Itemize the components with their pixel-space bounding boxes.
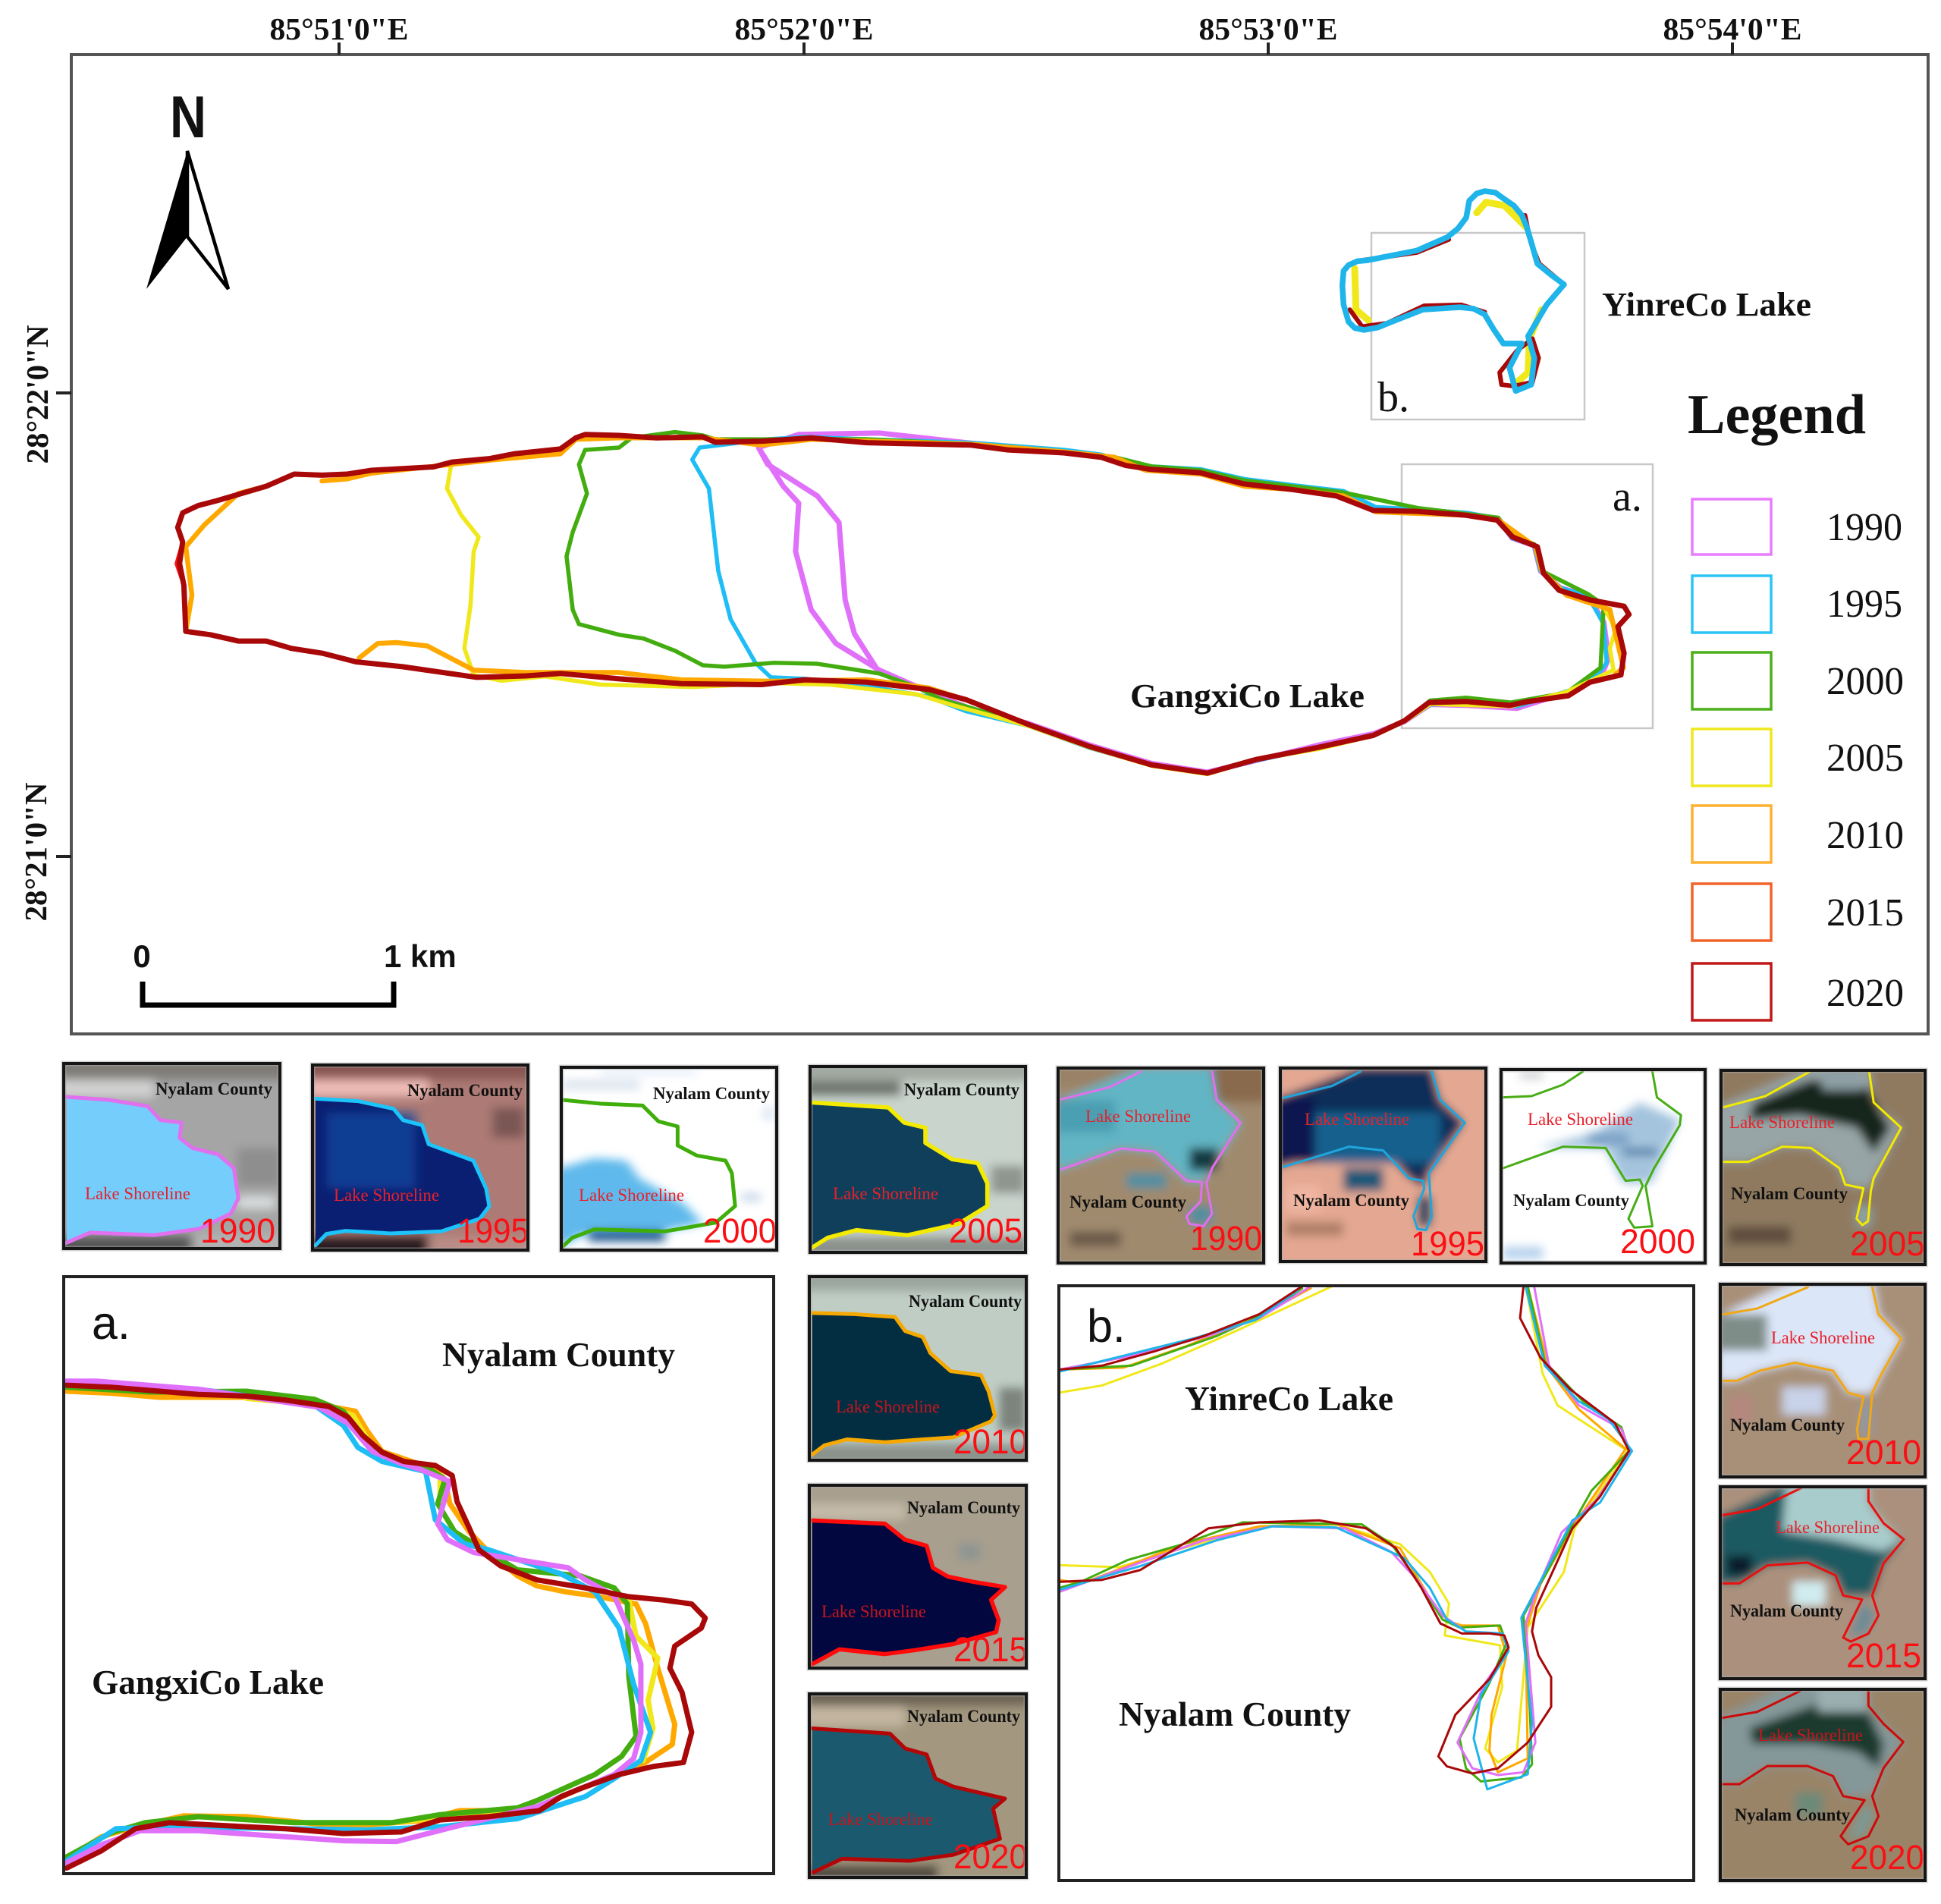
- legend title: Legend: [1688, 384, 1866, 446]
- thumbnail: GangxiCo 2020: Lake Shoreline: [828, 1810, 933, 1829]
- thumbnail: YinreCo 1990: Lake Shoreline: [1085, 1107, 1191, 1126]
- legend item 1990: 1990: [1826, 506, 1902, 549]
- thumbnail: GangxiCo 2015: [807, 1482, 1029, 1670]
- thumbnail: YinreCo 2015: [1717, 1484, 1928, 1681]
- label: inset a: a.: [1613, 473, 1642, 520]
- scale bar: [133, 938, 457, 1005]
- thumbnail: GangxiCo 2010: Lake Shoreline: [836, 1397, 940, 1416]
- legend item 2005: 2005: [1826, 737, 1904, 780]
- latitude axis labels: 28°21'0"N: [18, 782, 53, 921]
- thumbnail: YinreCo 1990: Nyalam County: [1069, 1192, 1186, 1211]
- longitude axis labels: 85°53'0"E: [1198, 11, 1338, 46]
- thumbnail: GangxiCo 1995: [309, 1062, 531, 1253]
- thumbnail: YinreCo 1990: 1990: [1190, 1219, 1262, 1258]
- thumbnail: GangxiCo 2015: Lake Shoreline: [821, 1602, 926, 1621]
- thumbnail: GangxiCo 1990: 1990: [200, 1211, 275, 1250]
- scale bar: 0: [133, 938, 151, 974]
- label: GangxiCo Lake: GangxiCo Lake: [1130, 677, 1365, 715]
- label: GangxiCo Lake: GangxiCo Lake: [92, 1664, 324, 1701]
- panel: inset b: [1059, 1286, 1694, 1880]
- thumbnail: YinreCo 2005: [1719, 1068, 1928, 1267]
- label: Nyalam County: Nyalam County: [1119, 1695, 1351, 1733]
- thumbnail: GangxiCo 2020: Nyalam County: [907, 1707, 1020, 1726]
- inset box a: [1402, 464, 1653, 728]
- panel: main map: [18, 11, 1928, 1034]
- label: a.: a.: [92, 1297, 130, 1349]
- legend item 2015: 2015: [1826, 891, 1904, 935]
- thumbnail: GangxiCo 2015: 2015: [953, 1630, 1028, 1669]
- thumbnail: GangxiCo 1990: Lake Shoreline: [85, 1184, 190, 1203]
- legend item 2000: 2000: [1826, 660, 1904, 703]
- thumbnail: YinreCo 1995: Nyalam County: [1293, 1191, 1409, 1210]
- thumbnail: YinreCo 2015: Nyalam County: [1730, 1601, 1843, 1620]
- thumbnail: YinreCo 2000: [1500, 1068, 1708, 1265]
- longitude axis labels: 85°51'0"E: [270, 11, 408, 46]
- thumbnail: YinreCo 2005: Lake Shoreline: [1729, 1113, 1835, 1132]
- thumbnail: GangxiCo 2010: Nyalam County: [909, 1292, 1022, 1311]
- thumbnail: GangxiCo 2005: Lake Shoreline: [833, 1184, 938, 1203]
- thumbnail: YinreCo 2010: Lake Shoreline: [1771, 1328, 1875, 1347]
- latitude axis labels: 28°22'0"N: [20, 325, 55, 464]
- legend item 1995: 1995: [1826, 583, 1902, 626]
- chart: inset b shorelines: [1060, 1287, 1632, 1789]
- icon: north arrow: [146, 83, 228, 289]
- thumbnail: GangxiCo 1995: Lake Shoreline: [334, 1186, 439, 1205]
- legend item 2015: [1692, 884, 1904, 941]
- thumbnail: GangxiCo 2010: 2010: [953, 1422, 1028, 1461]
- thumbnail: YinreCo 2015: Lake Shoreline: [1776, 1518, 1880, 1537]
- thumbnail: GangxiCo 2010: [807, 1274, 1029, 1463]
- thumbnail: YinreCo 2010: Nyalam County: [1730, 1415, 1845, 1434]
- legend item 2010: 2010: [1826, 814, 1904, 857]
- longitude axis labels: 85°54'0"E: [1663, 11, 1802, 46]
- thumbnail: YinreCo 2000: 2000: [1620, 1222, 1695, 1261]
- legend: [1688, 384, 1904, 1020]
- thumbnail: GangxiCo 1995: Nyalam County: [407, 1081, 523, 1100]
- icon: north arrow: N: [170, 83, 206, 150]
- thumbnail: YinreCo 2000: Lake Shoreline: [1528, 1110, 1633, 1129]
- thumbnail: YinreCo 1990: [1056, 1065, 1267, 1265]
- legend item 2000: [1692, 652, 1904, 709]
- thumbnail: YinreCo 2000: Nyalam County: [1513, 1191, 1629, 1210]
- label: YinreCo Lake: YinreCo Lake: [1602, 286, 1811, 323]
- legend item 2010: [1692, 806, 1904, 862]
- thumbnail: YinreCo 2020: Nyalam County: [1735, 1805, 1850, 1824]
- thumbnail: GangxiCo 2020: 2020: [953, 1837, 1028, 1876]
- chart: inset a shorelines: [67, 1381, 705, 1868]
- thumbnail: GangxiCo 2005: Nyalam County: [904, 1080, 1019, 1099]
- thumbnail: YinreCo 1995: [1277, 1065, 1488, 1264]
- legend item 1990: [1692, 499, 1902, 555]
- thumbnail: GangxiCo 2000: [550, 1064, 786, 1252]
- thumbnail: GangxiCo 2015: Nyalam County: [907, 1498, 1020, 1517]
- label: Nyalam County: Nyalam County: [442, 1336, 675, 1374]
- thumbnail: GangxiCo 2005: [807, 1064, 1029, 1255]
- thumbnail: YinreCo 2020: Lake Shoreline: [1758, 1726, 1863, 1745]
- thumbnail: YinreCo 2005: 2005: [1850, 1224, 1925, 1263]
- legend item 2005: [1692, 729, 1904, 786]
- thumbnail: YinreCo 2020: [1717, 1687, 1928, 1883]
- thumbnail: YinreCo 2010: 2010: [1846, 1433, 1921, 1472]
- latitude axis labels: [18, 325, 71, 921]
- thumbnail: YinreCo 1995: Lake Shoreline: [1305, 1110, 1409, 1129]
- thumbnail: YinreCo 2015: 2015: [1846, 1636, 1921, 1675]
- legend item 2020: [1692, 963, 1904, 1020]
- thumbnail: YinreCo 2005: Nyalam County: [1731, 1184, 1848, 1203]
- panel: inset a: [64, 1277, 774, 1874]
- longitude axis labels: [270, 11, 1802, 55]
- thumbnail: YinreCo 2010: [1717, 1282, 1928, 1479]
- thumbnail: GangxiCo 1990: [61, 1060, 282, 1252]
- thumbnail: GangxiCo 2000: Lake Shoreline: [579, 1186, 684, 1205]
- legend item 2020: 2020: [1826, 972, 1904, 1015]
- thumbnail: GangxiCo 2020: [807, 1692, 1029, 1880]
- legend item 1995: [1692, 576, 1902, 633]
- label: inset b: b.: [1377, 374, 1409, 421]
- thumbnail: GangxiCo 2000: Nyalam County: [653, 1084, 770, 1103]
- thumbnail: GangxiCo 1990: Nyalam County: [155, 1079, 272, 1098]
- thumbnail: YinreCo 1995: 1995: [1411, 1224, 1484, 1263]
- thumbnail: GangxiCo 2005: 2005: [949, 1211, 1022, 1250]
- scale bar: 1 km: [384, 938, 457, 974]
- thumbnail: YinreCo 2020: 2020: [1850, 1838, 1924, 1877]
- chart: YinreCo lake shorelines: [1343, 191, 1564, 391]
- label: YinreCo Lake: YinreCo Lake: [1185, 1380, 1393, 1418]
- label: b.: b.: [1087, 1300, 1126, 1352]
- map frame: [71, 55, 1928, 1034]
- chart: GangxiCo lake shorelines: [177, 432, 1629, 774]
- inset box b: [1371, 233, 1585, 419]
- thumbnail: GangxiCo 1995: 1995: [457, 1211, 529, 1250]
- thumbnail: GangxiCo 2000: 2000: [703, 1211, 777, 1250]
- longitude axis labels: 85°52'0"E: [734, 11, 874, 46]
